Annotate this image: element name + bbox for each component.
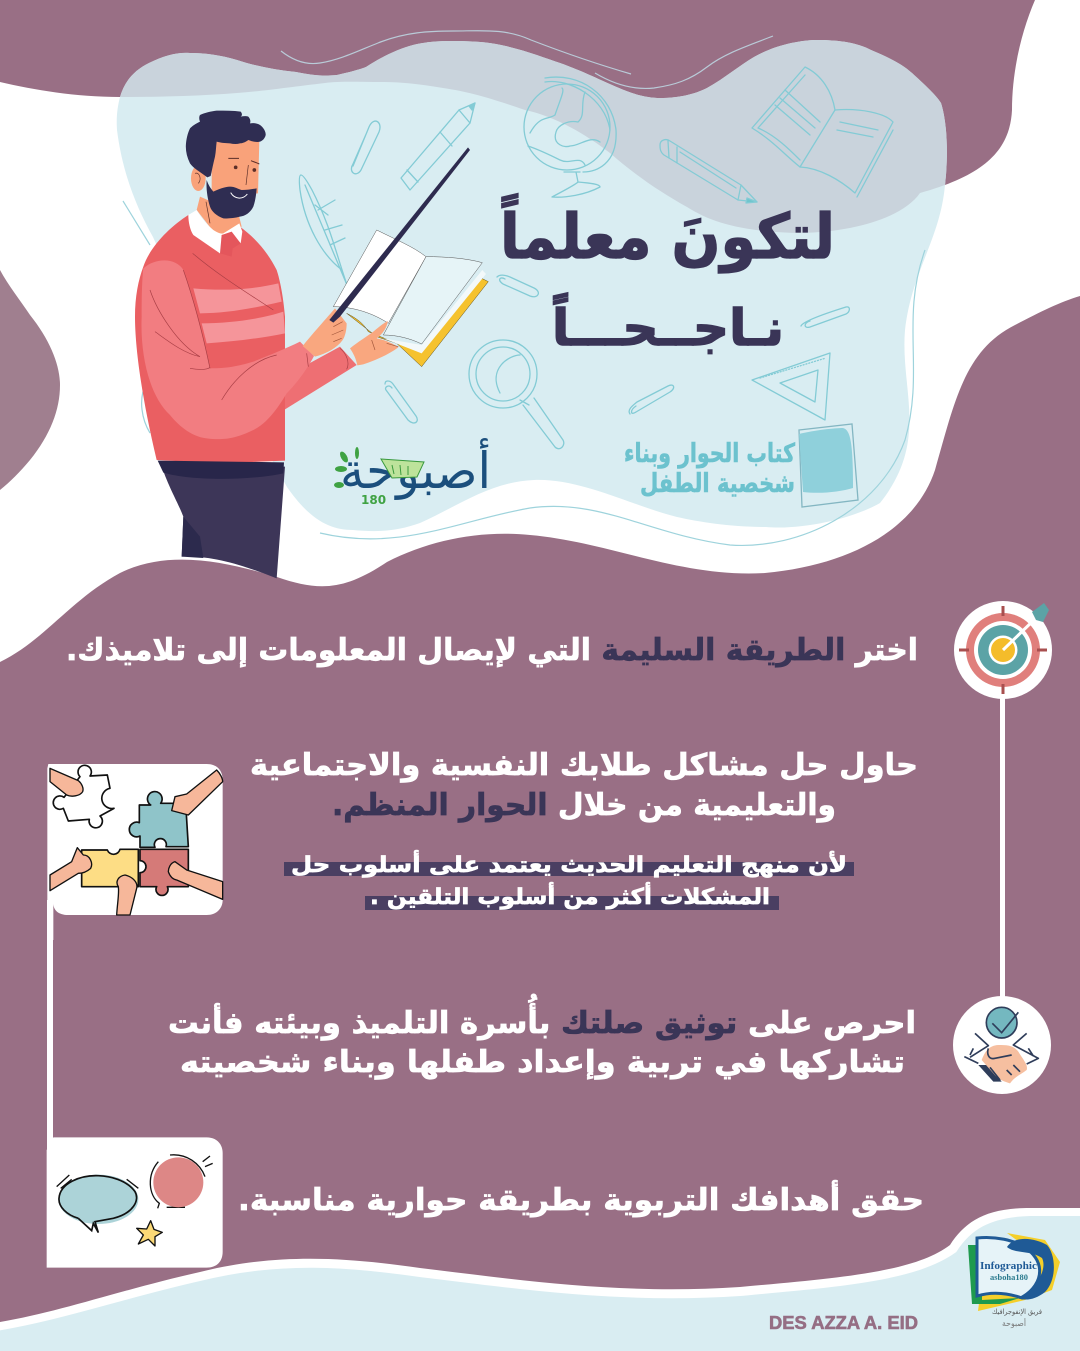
background: light blue blob bbox=[117, 40, 947, 531]
footer logo: أصبوحة bbox=[1002, 1318, 1026, 1328]
step 2 text: حاول حل مشاكل طلابك النفسية والاجتماعية bbox=[250, 748, 918, 783]
book title: شخصية الطفل bbox=[640, 469, 795, 499]
icon: triangle ruler bbox=[752, 353, 830, 420]
far sleeve bbox=[285, 347, 357, 409]
pointer stick bbox=[329, 147, 470, 323]
beard bbox=[206, 180, 257, 218]
icon: paperclips bbox=[385, 275, 849, 423]
puzzle card bbox=[47, 764, 223, 940]
hands bbox=[50, 768, 223, 915]
designer credit: DES AZZA A. EID bbox=[769, 1313, 918, 1333]
background: main mauve panel bbox=[0, 296, 1080, 1322]
step 3 text: احرص على توثيق صلتك بأُسرة التلميذ وبيئته فأنت bbox=[168, 993, 916, 1041]
card bbox=[47, 1137, 223, 1268]
logo wordmark: أصبوحة bbox=[340, 438, 491, 500]
title: نـاجــحـــاً bbox=[552, 292, 784, 357]
book reference bbox=[624, 424, 858, 507]
sweater stripes bbox=[193, 283, 282, 313]
pants bbox=[162, 467, 285, 578]
icon: pencil bbox=[401, 103, 475, 190]
book title: كتاب الحوار وبناء bbox=[624, 439, 796, 469]
step 1 text: اختر الطريقة السليمة التي لإيصال المعلومات إلى تلاميذك. bbox=[66, 633, 918, 668]
far hand bbox=[350, 321, 398, 365]
footer logo bbox=[968, 1233, 1060, 1328]
step 3 text: تشاركها في تربية وإعداد طفلها وبناء شخصيته bbox=[180, 1045, 905, 1080]
step 4 text: حقق أهدافك التربوية بطريقة حوارية مناسبة. bbox=[238, 1180, 924, 1218]
background: left mauve blob bbox=[0, 270, 60, 490]
background: blob overlap on top shape bbox=[120, 40, 947, 233]
white piece bbox=[53, 765, 114, 828]
icon: feather bbox=[299, 175, 347, 285]
logo words: Infographic bbox=[980, 1261, 1038, 1272]
decorative thin lines bbox=[123, 31, 925, 545]
icon: second pencil bbox=[660, 140, 757, 203]
sweater body bbox=[135, 215, 285, 463]
face details bbox=[228, 158, 259, 185]
step 3 text bbox=[168, 993, 916, 1080]
background: bottom white edge and light blue footer bbox=[0, 1213, 1080, 1351]
red piece bbox=[140, 849, 188, 895]
yellow piece bbox=[82, 849, 138, 887]
logo wave bbox=[1007, 1239, 1054, 1300]
ear bbox=[191, 166, 206, 191]
image: speech bubbles bbox=[47, 1137, 223, 1268]
step 2 text bbox=[250, 748, 918, 823]
logo yellow splash bbox=[978, 1233, 1060, 1311]
icon: paperclip bbox=[351, 121, 380, 174]
collar bbox=[188, 210, 242, 253]
blue bubble bbox=[57, 1175, 138, 1233]
step 2 note: لأن منهج التعليم الحديث يعتمد على أسلوب حل bbox=[291, 849, 847, 878]
footer logo: فريق الإنفوجرافيك bbox=[992, 1308, 1042, 1316]
logo leaves bbox=[334, 447, 359, 488]
illustration: teacher with book and pointer bbox=[135, 111, 488, 578]
neck bbox=[197, 197, 242, 240]
logo book bbox=[381, 459, 424, 478]
sweater creases bbox=[150, 253, 348, 400]
icon: magnifier bbox=[469, 340, 564, 449]
step 2 text: والتعليمية من خلال الحوار المنظم. bbox=[332, 788, 836, 823]
face bbox=[212, 140, 259, 197]
step 2 note: المشكلات أكثر من أسلوب التلقين . bbox=[370, 881, 770, 910]
near hand bbox=[303, 308, 347, 357]
logo: asbouha 180 bbox=[334, 438, 491, 507]
school doodles bbox=[299, 67, 893, 449]
book pages bbox=[333, 230, 426, 323]
icon: globe bbox=[524, 77, 616, 197]
waistband bbox=[158, 461, 284, 479]
title bbox=[500, 192, 835, 357]
book title bbox=[624, 439, 796, 499]
logo number: 180 bbox=[361, 493, 386, 507]
logo green page bbox=[968, 1245, 1020, 1304]
icon: small book bbox=[799, 424, 858, 507]
star bbox=[137, 1221, 162, 1246]
icon: open book bbox=[752, 67, 893, 197]
icon: handshake bbox=[953, 996, 1051, 1094]
hair bbox=[186, 111, 266, 177]
image: puzzle hands bbox=[47, 764, 223, 940]
teal piece bbox=[129, 792, 188, 847]
step 2 note bbox=[284, 849, 854, 910]
logo page bbox=[977, 1237, 1040, 1298]
background: top mauve shape bbox=[0, 0, 1035, 233]
near sleeve bbox=[141, 260, 314, 439]
red bubble bbox=[150, 1155, 213, 1208]
icon: target bbox=[954, 601, 1052, 699]
footer logo: asboha180 bbox=[990, 1273, 1028, 1282]
title: لتكونَ معلماً bbox=[500, 192, 835, 273]
connector lines bbox=[47, 690, 1005, 1152]
book cover bbox=[347, 278, 488, 367]
